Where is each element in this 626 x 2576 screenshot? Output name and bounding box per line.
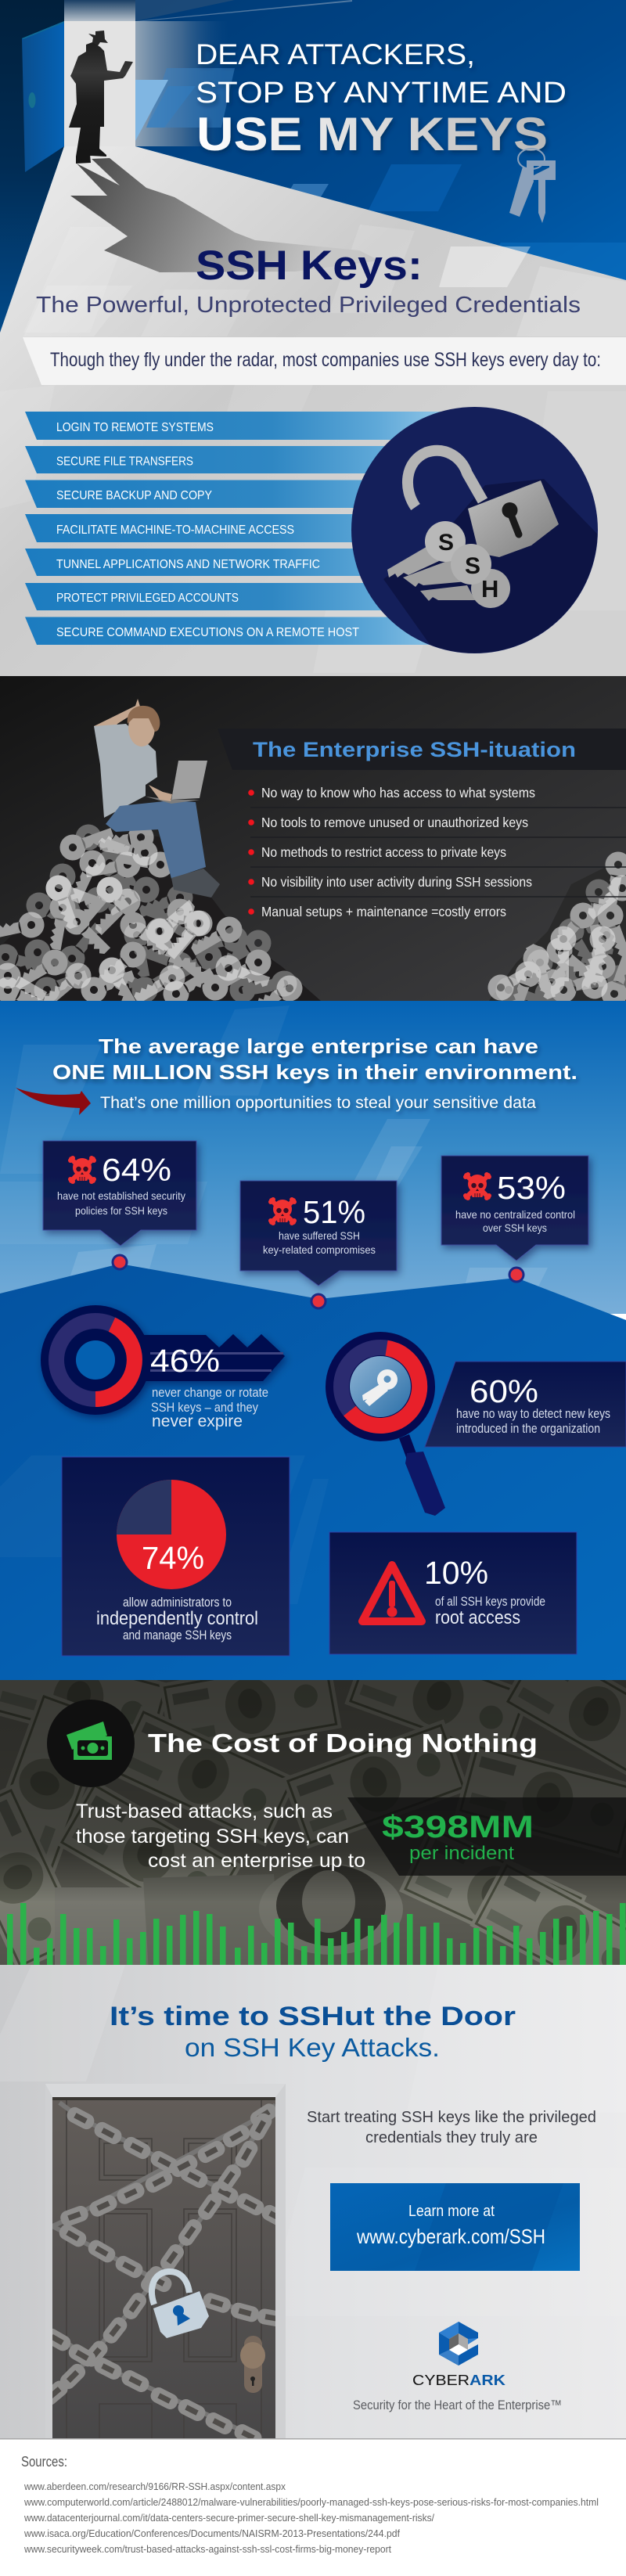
attacker silhouette: [69, 31, 133, 164]
stat: 10% warning: root access: [435, 1607, 520, 1628]
footer: sources: Sources:: [21, 2454, 67, 2470]
list row: LOGIN TO REMOTE SYSTEMS: [56, 421, 214, 434]
stat: 74% pie: independently control: [96, 1608, 258, 1629]
callout: 64%: have not established security: [57, 1189, 185, 1202]
section: statistics: [0, 1001, 626, 1680]
list row: [25, 412, 470, 440]
list row: SECURE BACKUP AND COPY: [56, 489, 212, 502]
callout: 53%: have no centralized control: [455, 1208, 575, 1221]
key pile right: [488, 851, 626, 1001]
bar chart: [7, 1903, 626, 1965]
list row: [25, 480, 470, 508]
stat: 74% pie: [62, 1457, 290, 1656]
title: USE MY KEYS: [196, 108, 548, 160]
callout: $398MM: [347, 1797, 626, 1876]
list row: FACILITATE MACHINE-TO-MACHINE ACCESS: [56, 523, 294, 537]
call to action: [330, 2183, 580, 2271]
callout: $398MM: per incident: [409, 1843, 514, 1864]
icon: open padlock and SSH keys circle: S: [465, 553, 480, 579]
heading: one million keys: The average large enterprise can have: [99, 1034, 538, 1058]
stat: 74% pie: 74%: [142, 1540, 204, 1576]
door knob: [240, 2336, 265, 2393]
icon: money on black circle: [47, 1700, 135, 1787]
heading: It’s time to SSHut the Door: [110, 2002, 516, 2031]
heading: one million keys: That’s one million opportunities to steal your sensitive data: [100, 1094, 536, 1112]
icon: open padlock and SSH keys circle: [351, 407, 598, 653]
text block: Trust-based attacks, such as: [76, 1801, 333, 1822]
illustration: chained door: [39, 2084, 292, 2448]
list row: [25, 583, 470, 610]
footer: sources: www.securityweek.com/trust-based-attacks-against-ssh-ssl-cost-firms-big-money-report: [23, 2543, 391, 2555]
logo: CyberArk: [353, 2322, 562, 2412]
attacker shadow on floor: [70, 158, 380, 272]
callout: $398MM: $398MM: [382, 1810, 534, 1844]
list row: [25, 617, 470, 645]
stat: 10% warning: [329, 1532, 577, 1654]
icon: hanging keys: [509, 149, 556, 223]
bullet list: [248, 785, 626, 919]
stat: 60% box: [425, 1362, 626, 1447]
subtitle block: The Powerful, Unprotected Privileged Credentials: [36, 293, 581, 318]
section: The Enterprise SSH-ituation: [0, 676, 626, 1020]
callout: 53%: over SSH keys: [483, 1221, 547, 1234]
heading: on SSH Key Attacks.: [185, 2033, 440, 2062]
stat: 60% box: 60%: [470, 1373, 538, 1409]
title: [196, 38, 567, 160]
text block: [76, 1801, 365, 1872]
footer: sources: www.aberdeen.com/research/9166/RR-SSH.aspx/content.aspx: [23, 2481, 286, 2492]
list row: PROTECT PRIVILEGED ACCOUNTS: [56, 592, 239, 605]
open door panel: [22, 21, 64, 172]
stat: 46% key ring: never change or rotate: [152, 1385, 268, 1400]
list row: SECURE COMMAND EXECUTIONS ON A REMOTE HOST: [56, 626, 359, 639]
callout: 64%: policies for SSH keys: [75, 1204, 167, 1217]
portrait on banknote: [259, 1864, 403, 1955]
key pile left: [0, 825, 321, 1001]
text block: cost an enterprise up to: [148, 1850, 365, 1872]
list row: [25, 549, 470, 576]
chart markers: [111, 1254, 524, 1310]
text block: those targeting SSH keys, can: [76, 1826, 349, 1847]
icon: open padlock and SSH keys circle: H: [481, 575, 498, 603]
icon: warning triangle: [362, 1565, 422, 1621]
stat: 46% key ring: SSH keys – and they: [151, 1400, 258, 1415]
logo: CyberArk: CYBER ARK: [412, 2373, 505, 2388]
section: The Cost of Doing Nothing: [0, 1680, 626, 1965]
callout: 53%: [441, 1156, 588, 1261]
callout: 53%: 53%: [497, 1170, 566, 1206]
title: DEAR ATTACKERS,: [196, 38, 475, 70]
man with laptop on key pile: [94, 699, 220, 898]
list row: [25, 514, 470, 542]
callout: 51%: 51%: [303, 1194, 365, 1230]
text block: credentials they truly are: [365, 2129, 538, 2146]
icon: open padlock and SSH keys circle: S: [438, 530, 454, 556]
icon: padlock: [152, 2272, 209, 2338]
bullet row: No methods to restrict access to private keys: [261, 844, 506, 860]
heading bar: [218, 729, 626, 770]
icon: white key: [362, 1369, 398, 1406]
footer: sources: www.computerworld.com/article/2488012/malware-vulnerabilities/poorly-managed-ssh-keys-pose-serious-risks-for-most-companies.html: [23, 2496, 599, 2508]
list row: TUNNEL APPLICATIONS AND NETWORK TRAFFIC: [56, 558, 320, 571]
text block: Start treating SSH keys like the privileged: [307, 2109, 596, 2126]
floor light beam: [0, 146, 626, 676]
section: header hero: [0, 0, 626, 676]
stat: 74% pie: and manage SSH keys: [123, 1628, 232, 1642]
footer: sources: [0, 2438, 626, 2576]
heading: one million keys: [52, 1034, 577, 1112]
heading: [110, 2002, 516, 2062]
stat: 46% key ring: never expire: [152, 1412, 243, 1430]
logo mark: [439, 2322, 478, 2366]
chains: [52, 2100, 275, 2438]
heading: one million keys: ONE MILLION SSH keys in their environment.: [52, 1060, 577, 1084]
callout: 51%: key-related compromises: [263, 1243, 376, 1256]
bullet row: No visibility into user activity during SSH sessions: [261, 874, 532, 890]
list row: [25, 446, 470, 473]
title: STOP BY ANYTIME AND: [196, 77, 567, 110]
list row: SECURE FILE TRANSFERS: [56, 455, 193, 468]
heading: The Cost of Doing Nothing: [148, 1729, 538, 1758]
panel: SSH key uses list: [0, 385, 626, 673]
callout: 64%: [43, 1141, 196, 1246]
stat: 46% key ring: 46%: [150, 1343, 220, 1379]
section: SSHut the door: [0, 1965, 626, 2448]
subtitle block: SSH Keys:: [196, 243, 423, 289]
stat: 46% key ring: [41, 1305, 285, 1430]
footer: sources: www.isaca.org/Education/Conferences/Documents/NAISRM-2013-Presentations/244.pdf: [23, 2527, 400, 2539]
text block: [307, 2109, 596, 2146]
logo: CyberArk: Security for the Heart of the Enterprise™: [353, 2398, 562, 2412]
stat: 10% warning: 10%: [424, 1555, 488, 1591]
band: intro sentence: [23, 337, 626, 385]
call to action: www.cyberark.com/SSH: [356, 2225, 545, 2248]
callout: 51%: [240, 1181, 397, 1286]
callout: 64%: 64%: [102, 1152, 171, 1188]
door opening: [64, 21, 135, 146]
stat: 10% warning: of all SSH keys provide: [435, 1594, 545, 1609]
call to action: Learn more at: [408, 2203, 495, 2220]
heading bar: The Enterprise SSH-ituation: [253, 738, 576, 761]
callout: 51%: have suffered SSH: [279, 1229, 360, 1242]
icon: magnifier with key: [326, 1332, 445, 1516]
bullet row: No tools to remove unused or unauthorized keys: [261, 815, 528, 830]
bullet row: Manual setups + maintenance =costly errors: [261, 904, 506, 919]
bullet row: No way to know who has access to what systems: [261, 785, 535, 801]
stat: 74% pie: allow administrators to: [123, 1595, 232, 1610]
subtitle block: [36, 243, 581, 318]
arrow: [16, 1088, 91, 1115]
stat: 60% box: introduced in the organization: [456, 1421, 600, 1436]
footer: sources: www.datacenterjournal.com/it/data-centers-secure-primer-secure-shell-key-mismanagement-risks/: [23, 2512, 434, 2524]
